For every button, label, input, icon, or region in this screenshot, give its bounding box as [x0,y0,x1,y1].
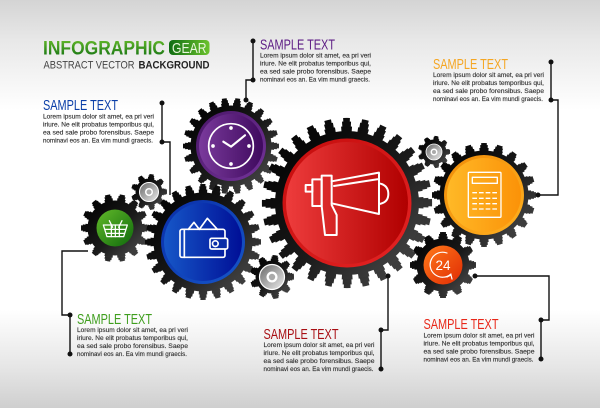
badge: gear: GEAR [172,40,207,57]
text block: purple: ea sed sale probo forensibus. Saepe [260,68,371,76]
text block: red-orange: nominavi eos an. Ea vim mundi graecis. [424,356,534,364]
text block: purple: SAMPLE TEXT [260,38,335,54]
text block: dark red: SAMPLE TEXT [264,327,339,343]
text block: orange [433,57,544,103]
icon: calculator [468,172,501,217]
small grey gear bottom [251,256,293,298]
text block: blue [43,98,154,144]
text block: green [77,312,188,358]
text block: orange: ea sed sale probo forensibus. Saepe [433,88,544,95]
text block: purple: Lorem ipsum dolor sit amet, ea pri veri [260,52,371,60]
text block: orange: iriure. Ne elit probatus temporibus qui, [433,80,544,87]
text block: blue: nominavi eos an. Ea vim mundi graecis. [43,138,153,144]
text block: red-orange: iriure. Ne elit probatus temporibus qui, [424,340,535,348]
text block: dark red: ea sed sale probo forensibus. Saepe [264,358,375,365]
text block: green: iriure. Ne elit probatus temporibus qui, [77,335,188,342]
title block [43,38,210,72]
text block: green: ea sed sale probo forensibus. Saepe [77,343,188,350]
text block: blue: iriure. Ne elit probatus temporibus qui, [43,122,154,128]
gear: red megaphone [265,121,429,285]
subtitle: BACKGROUND [138,60,210,72]
text block: orange: SAMPLE TEXT [433,57,508,73]
text block: red-orange: SAMPLE TEXT [424,317,499,333]
subtitle [44,60,210,72]
small grey gear top right [419,137,449,167]
gear: orange 24 hours [411,233,475,297]
connector lines [62,38,558,372]
subtitle: ABSTRACT VECTOR [44,60,135,72]
text block: dark red [264,327,375,373]
text block: orange: Lorem ipsum dolor sit amet, ea pri veri [433,72,544,79]
connector end dots on gears [244,98,540,278]
text block: red-orange: ea sed sale probo forensibus. Saepe [424,348,535,356]
text block: purple: iriure. Ne elit probatus temporibus qui, [260,60,371,68]
small grey gear left [132,175,166,209]
gear: green basket [82,195,148,261]
icon: wallet [180,218,228,257]
icon: megaphone [306,173,388,235]
text block: purple: nominavi eos an. Ea vim mundi graecis. [260,76,370,84]
text block: orange: nominavi eos an. Ea vim mundi graecis. [433,96,543,103]
gear: orange calculator [434,145,534,245]
gear: blue wallet [147,186,259,298]
text block: dark red: Lorem ipsum dolor sit amet, ea pri veri [264,342,375,349]
text block: dark red: nominavi eos an. Ea vim mundi graecis. [264,366,374,373]
icon: 24 hours: 24 [435,258,451,273]
text block: blue: ea sed sale probo forensibus. Saepe [43,130,154,136]
text block: green: nominavi eos an. Ea vim mundi graecis. [77,351,187,358]
text block: green: Lorem ipsum dolor sit amet, ea pri veri [77,327,188,334]
text block: blue: Lorem ipsum dolor sit amet, ea pri veri [43,114,154,120]
gear: purple clock [185,100,277,192]
text block: purple [260,38,371,84]
icon: clock [209,124,253,168]
text block: red-orange: Lorem ipsum dolor sit amet, ea pri veri [424,332,535,340]
text block: red-orange [424,317,535,364]
text block: dark red: iriure. Ne elit probatus temporibus qui, [264,350,375,357]
text block: green: SAMPLE TEXT [77,312,152,328]
text block: blue: SAMPLE TEXT [43,98,118,114]
icon: basket [103,221,127,237]
title: infographic: INFOGRAPHIC [43,38,165,60]
